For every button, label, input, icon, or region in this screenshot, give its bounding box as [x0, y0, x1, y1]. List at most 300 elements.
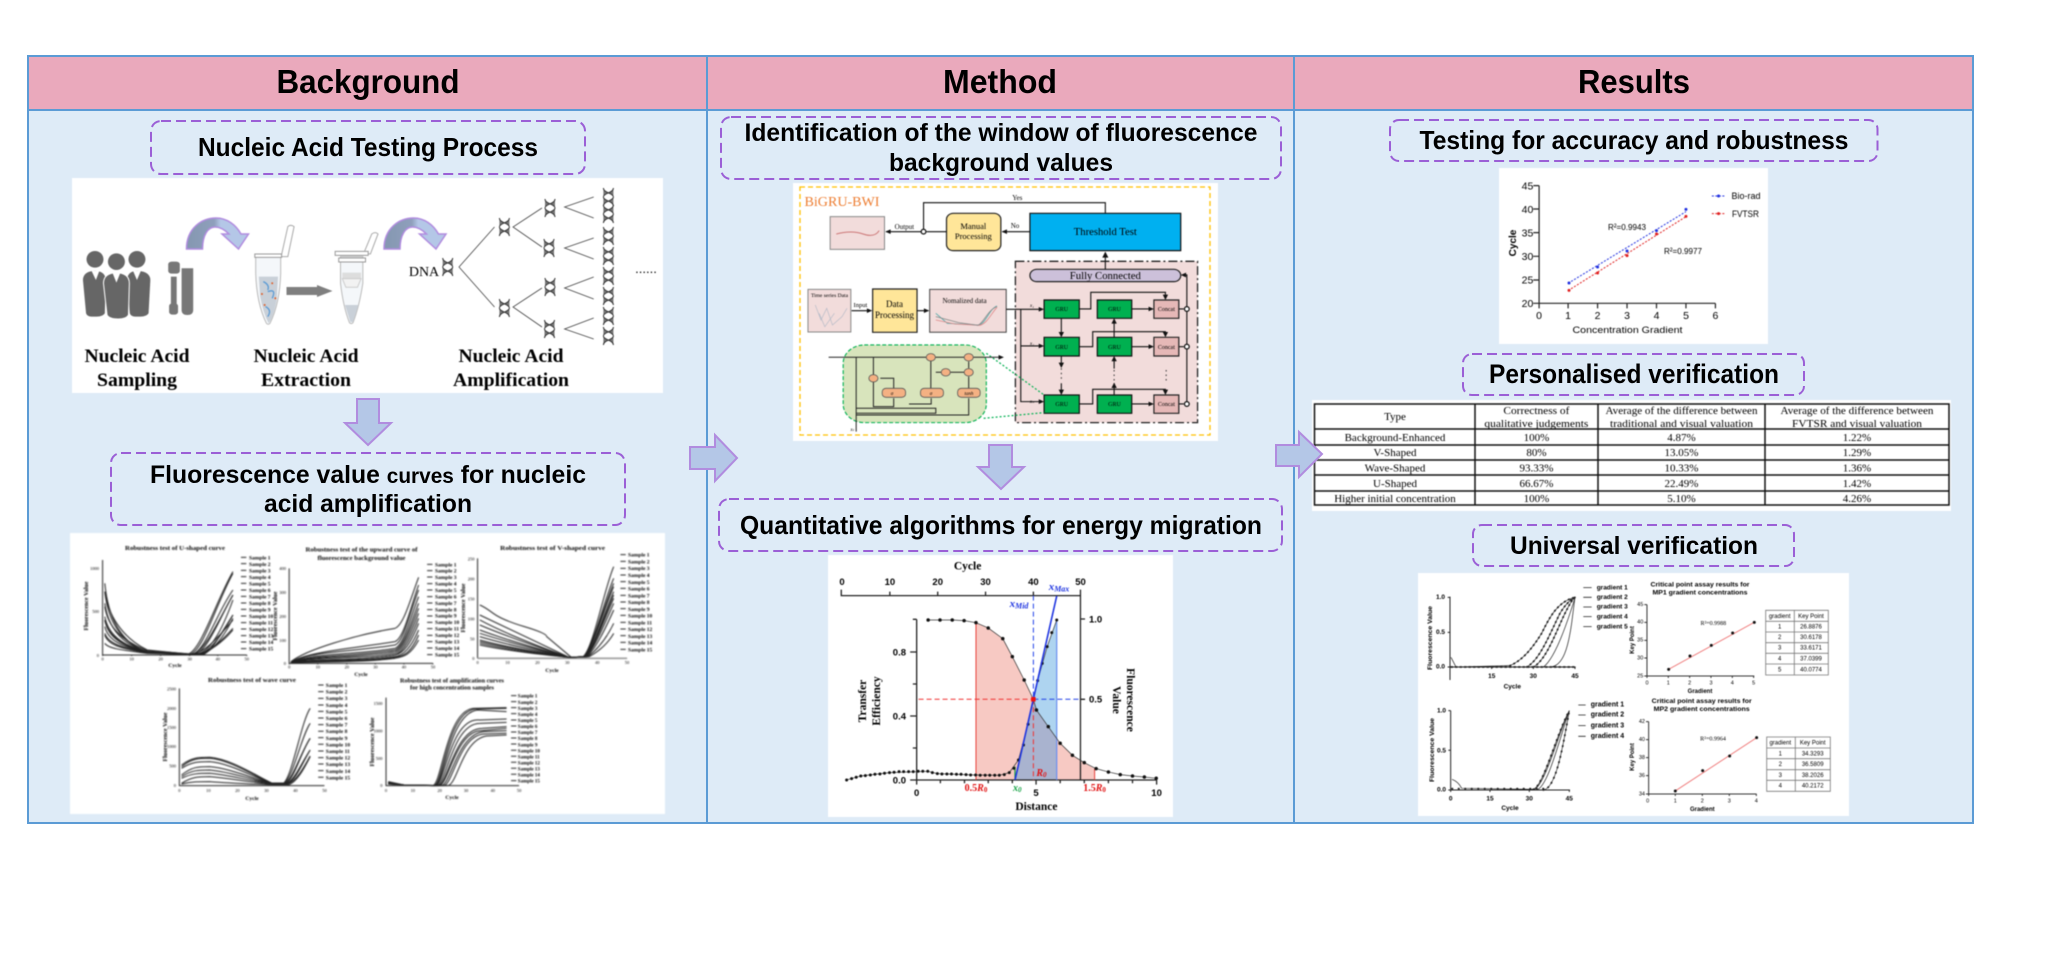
chart: MP2 amplification curves: 45 [1566, 795, 1573, 802]
chart: upward curve: fluorescence background value [318, 555, 406, 562]
chart: high concentration curve: Sample 1 [518, 695, 538, 700]
chart: U-shaped curve: Sample 2 [249, 562, 271, 568]
chart: high concentration curve: 40 [491, 788, 496, 793]
chart: U-shaped curve: Sample 5 [249, 581, 271, 587]
chart: MP1 amplification curves: gradient 3 [1597, 604, 1628, 611]
table: personalised verification: 93.33% [1519, 462, 1553, 474]
table: MP1 key points: 2 [1778, 635, 1782, 641]
chart: high concentration curve: Sample 2 [518, 701, 538, 706]
chart: MP2 amplification curves: gradient 1 [1591, 702, 1624, 709]
table: MP2 key points: 36.5809 [1802, 762, 1824, 768]
icon: people [83, 251, 150, 319]
chart: U-shaped curve: Sample 12 [249, 627, 274, 633]
chart: U-shaped curve: Sample 8 [249, 601, 271, 607]
image: nucleic acid testing process [72, 178, 663, 393]
GRU cells [1044, 300, 1132, 413]
chart: MP1 amplification curves: 30 [1530, 673, 1537, 680]
chart labels: Max [1053, 584, 1069, 594]
chart: V-shaped curve: Sample 3 [628, 566, 650, 572]
chart: wave curve: 500 [169, 764, 177, 768]
table: MP2 key points [1767, 737, 1830, 791]
chart: high concentration curve: 0 [380, 783, 383, 788]
chart: MP1 amplification curves: 1.0 [1436, 594, 1445, 601]
chart: upward curve: Sample 9 [435, 614, 457, 620]
chart: cycle vs concentration gradient: Bio-rad [1732, 191, 1760, 201]
chart: upward curve: 20 [345, 664, 350, 670]
labels: process steps: Nucleic Acid [458, 346, 564, 367]
table: MP2 key points: 38.2026 [1802, 773, 1824, 779]
chart: U-shaped curve: Robustness test of U-shaped curve [125, 545, 225, 552]
time series box [808, 289, 851, 332]
chart: upward curve: 30 [373, 664, 378, 670]
chart: U-shaped curve: 20 [158, 656, 164, 662]
chart: high concentration curve: 500 [376, 756, 383, 761]
table: personalised verification: traditional and visual valuation [1610, 418, 1754, 430]
chart: high concentration curve: Sample 6 [518, 725, 538, 730]
chart: MP2 critical point regression: 1 [1674, 799, 1677, 805]
chart: MP1 critical point regression: 30 [1637, 655, 1643, 661]
tangent [1015, 596, 1057, 780]
chart: cycle vs concentration gradient: 45 [1522, 180, 1533, 192]
chart: MP1 critical point regression [1630, 581, 1755, 695]
chart: MP2 amplification curves: Cycle [1501, 805, 1519, 812]
chart labels: 0.8 [893, 648, 906, 658]
chart: energy migration transfer efficiency [828, 555, 1173, 817]
labels: process steps: Nucleic Acid [84, 346, 190, 367]
chart: MP1 critical point regression: R²=0.9988 [1700, 621, 1726, 627]
chart: V-shaped curve: Sample 10 [628, 614, 653, 620]
chart: V-shaped curve: Sample 2 [628, 559, 650, 565]
chart: MP2 amplification curves: 0.5 [1437, 747, 1446, 754]
chart: MP2 amplification curves: gradient 4 [1591, 733, 1624, 740]
chart: high concentration curve: Cycle [445, 795, 459, 801]
table: personalised verification: U-Shaped [1373, 478, 1417, 490]
subheading: Nucleic Acid Testing Process [151, 121, 585, 174]
table: MP1 key points: Key Point [1798, 614, 1824, 620]
chart: V-shaped curve: Sample 14 [628, 641, 653, 647]
chart: upward curve: Sample 13 [435, 639, 460, 645]
diagram: DNA amplification tree [409, 188, 657, 345]
chart: upward curve: Cycle [354, 672, 368, 678]
table: MP1 key points: 33.6171 [1800, 646, 1822, 652]
table: MP2 key points: Key Point [1800, 740, 1826, 746]
chart: U-shaped curve: 0 [97, 653, 100, 658]
chart: high concentration curve: 30 [464, 788, 469, 793]
chart: wave curve: 2500 [167, 686, 177, 692]
chart: upward curve: Sample 10 [435, 620, 460, 626]
chart: high concentration curve: 0 [385, 788, 388, 793]
icon: extraction tube two [335, 233, 378, 324]
chart: MP1 amplification curves: gradient 4 [1597, 613, 1628, 620]
diagram labels: Concat [1158, 345, 1175, 351]
chart: upward curve: 400 [279, 566, 287, 571]
chart: wave curve: 30 [264, 788, 269, 793]
subheading: Personalised verification [1463, 354, 1804, 395]
chart: MP1 amplification curves [1427, 584, 1628, 690]
chart: wave curve: Sample 10 [326, 742, 350, 748]
chart: upward curve: Sample 15 [435, 652, 460, 658]
chart labels: 50 [1075, 577, 1086, 588]
table: personalised verification: 80% [1526, 447, 1546, 459]
GRU detail panel [829, 345, 1044, 432]
diagram labels: GRU [1108, 345, 1121, 351]
icon: extraction tube one [255, 225, 294, 324]
chart: MP2 critical point regression: 36 [1639, 773, 1645, 779]
chart: wave curve: Sample 12 [326, 756, 350, 762]
chart: MP2 critical point regression: 42 [1639, 719, 1645, 725]
chart: wave curve: Sample 7 [326, 723, 348, 729]
chart: cycle vs concentration gradient [1499, 168, 1768, 344]
shaded regions [976, 620, 1095, 780]
chart: cycle vs concentration gradient: FVTSR [1732, 209, 1759, 219]
chart: cycle vs concentration gradient: 2 [1595, 310, 1601, 322]
chart: MP2 critical point regression [1630, 698, 1758, 813]
table: MP2 key points: 4 [1779, 784, 1783, 790]
table: personalised verification: 1.36% [1843, 462, 1871, 474]
table: personalised verification: V-Shaped [1374, 447, 1417, 459]
manual processing box [947, 213, 1001, 251]
diagram labels: GRU [1108, 402, 1121, 408]
chart labels [839, 560, 1162, 813]
chart: MP1 critical point regression: Gradient [1688, 689, 1712, 695]
chart: V-shaped curve: 30 [565, 660, 570, 665]
diagram labels: GRU [1108, 307, 1121, 313]
chart: upward curve: 100 [279, 638, 287, 643]
subheading: Personalised verification: Personalised verification [1489, 359, 1779, 389]
chart labels: 0.0 [893, 776, 906, 786]
table: personalised verification: 5.10% [1667, 493, 1696, 505]
chart: high concentration curve: Robustness test of amplification curves [400, 677, 504, 684]
table: MP1 key points [1766, 610, 1828, 675]
chart: U-shaped curve: Sample 13 [249, 634, 274, 640]
diagram: BiGRU-BWI architecture: BiGRU-BWI [804, 195, 880, 210]
icon: straight arrow [286, 285, 332, 297]
fully connected layer [1030, 269, 1181, 282]
chart: V-shaped curve: Sample 8 [628, 600, 650, 606]
chart labels: 0 [1018, 786, 1022, 794]
chart: cycle vs concentration gradient: 20 [1522, 298, 1533, 310]
subheading: Fluorescence value curves: Fluorescence value curves for nucleic [150, 461, 586, 489]
chart: high concentration curve: Sample 15 [518, 780, 540, 785]
chart labels: 0.5R [965, 783, 984, 794]
chart: high concentration curve: Sample 9 [518, 743, 538, 748]
chart: V-shaped curve: Sample 13 [628, 634, 653, 640]
chart: wave curve: Cycle [245, 796, 259, 802]
table: MP1 key points: 5 [1778, 667, 1782, 673]
heading bar: Results [1294, 56, 1973, 110]
table: personalised verification: 13.05% [1665, 447, 1698, 459]
chart: V-shaped curve: Sample 11 [628, 620, 652, 626]
chart: wave curve: Sample 13 [326, 762, 350, 768]
output chart box [830, 217, 885, 249]
icon: curved arrow one [186, 218, 248, 249]
chart: wave curve: 1000 [167, 744, 177, 749]
table: MP2 key points: 40.2172 [1802, 784, 1824, 790]
chart: MP1 critical point regression: MP1 gradient concentrations [1652, 589, 1748, 596]
chart: wave curve: Sample 11 [326, 749, 350, 755]
table: MP1 key points: 37.0399 [1800, 656, 1822, 662]
chart: MP1 amplification curves: Fluorescence Value [1427, 606, 1434, 670]
chart: MP2 amplification curves: 30 [1526, 795, 1533, 802]
chart: cycle vs concentration gradient: Concentration Gradient [1572, 325, 1683, 336]
chart: upward curve: 10 [316, 664, 321, 670]
chart: U-shaped curve: 40 [216, 656, 221, 662]
chart labels: 20 [932, 577, 943, 588]
chart: U-shaped curve [84, 545, 274, 669]
table: personalised verification: 100% [1524, 432, 1549, 444]
chart: upward curve: Sample 5 [435, 588, 457, 594]
chart: U-shaped curve: Sample 3 [249, 568, 271, 574]
chart: MP1 amplification curves: gradient 1 [1597, 584, 1628, 591]
subheading: Fluorescence value curves: acid amplification [264, 490, 472, 518]
chart: MP2 critical point regression: 34 [1639, 791, 1645, 797]
chart labels: Fluorescence [1124, 668, 1136, 732]
chart: U-shaped curve: Sample 15 [249, 647, 274, 653]
chart labels: 0 [839, 577, 845, 588]
chart labels: R [1036, 768, 1043, 779]
chart: V-shaped curve: Cycle [545, 668, 559, 674]
chart: cycle vs concentration gradient: Cycle [1508, 229, 1519, 256]
subheading: Nucleic Acid Testing Process: Nucleic Acid Testing Process [198, 132, 538, 162]
table: personalised verification: Correctness of [1503, 405, 1570, 417]
diagram labels: x₁ [1029, 304, 1034, 309]
diagram: DNA amplification tree: ...... [635, 261, 657, 276]
chart: MP1 critical point regression: 25 [1637, 673, 1643, 679]
image: universal verification charts [1418, 573, 1849, 816]
table: MP1 key points: gradient [1769, 614, 1791, 620]
table: personalised verification: Higher initial concentration [1334, 493, 1456, 505]
diagram labels: xₙ [1029, 400, 1035, 405]
chart labels: 0 [914, 788, 919, 799]
chart: MP1 amplification curves: Cycle [1504, 683, 1521, 690]
arrow: down to fluorescence curves [345, 399, 391, 445]
chart: U-shaped curve: 500 [92, 609, 100, 614]
chart: MP1 critical point regression: 35 [1637, 638, 1643, 644]
chart: MP1 critical point regression: 1 [1667, 681, 1670, 687]
data processing box [873, 289, 917, 332]
chart: upward curve: Fluorescence Value [273, 591, 279, 641]
diagram labels: Processing [875, 310, 914, 320]
heading bar: Method: Method [943, 63, 1057, 100]
diagram labels: Concat [1158, 307, 1175, 313]
table: personalised verification [1312, 400, 1951, 511]
labels: process steps [84, 346, 569, 391]
subheading: identification of window: background values [889, 149, 1113, 177]
chart: wave curve: Sample 5 [326, 709, 348, 715]
arrow: background to method [690, 435, 737, 481]
chart: V-shaped curve: Sample 12 [628, 627, 653, 633]
chart: V-shaped curve: Sample 5 [628, 580, 650, 586]
chart: high concentration curve: Fluorescence Value [370, 717, 376, 767]
chart labels: 0 [984, 786, 988, 794]
diagram labels: σ [930, 392, 933, 397]
chart: wave curve: 1500 [167, 725, 177, 730]
chart labels: 0.4 [893, 712, 907, 722]
chart labels: Distance [1015, 801, 1057, 813]
chart: upward curve: Sample 2 [435, 569, 457, 575]
table: personalised verification: 100% [1524, 493, 1549, 505]
chart: U-shaped curve: 0 [101, 656, 104, 662]
diagram: DNA amplification tree: DNA [409, 265, 440, 280]
table: MP1 key points: 30.6178 [1800, 635, 1822, 641]
diagram labels: No [1011, 222, 1020, 230]
heading bar: Background [28, 56, 707, 110]
chart: high concentration curve: Sample 12 [518, 761, 540, 766]
chart labels: Efficiency [871, 676, 883, 726]
chart: wave curve: 10 [206, 788, 211, 793]
chart: U-shaped curve: Sample 9 [249, 608, 271, 614]
chart: MP2 amplification curves: 15 [1486, 795, 1494, 802]
chart: MP2 amplification curves: 0.0 [1437, 787, 1446, 794]
chart: wave curve: 40 [293, 788, 298, 793]
chart: wave curve: Sample 8 [326, 729, 348, 735]
table: personalised verification: qualitative judgements [1484, 418, 1588, 430]
chart labels: 40 [1028, 577, 1039, 588]
chart: MP1 critical point regression: 3 [1709, 681, 1713, 687]
heading bar: Results: Results [1578, 63, 1690, 100]
chart: MP1 amplification curves: 15 [1488, 673, 1496, 680]
chart: wave curve [163, 677, 350, 802]
guides [919, 596, 1095, 780]
chart: U-shaped curve: Sample 11 [249, 621, 273, 627]
table: personalised verification: 66.67% [1519, 478, 1553, 490]
chart: high concentration curve: 20 [437, 788, 443, 793]
table: MP2 key points: 34.3293 [1802, 752, 1824, 758]
labels: process steps: Nucleic Acid [254, 346, 359, 367]
diagram labels: Processing [955, 231, 992, 241]
chart: V-shaped curve: Sample 1 [628, 553, 650, 559]
image: fluorescence curve charts [70, 533, 665, 814]
chart: cycle vs concentration gradient: 3 [1624, 310, 1630, 322]
chart labels: Value [1110, 686, 1122, 714]
chart: upward curve: Sample 4 [435, 582, 457, 588]
chart: U-shaped curve: Sample 14 [249, 640, 274, 646]
labels: process steps: Amplification [453, 370, 569, 391]
chart: V-shaped curve: 20 [535, 660, 540, 665]
diagram labels: Time series Data [811, 293, 849, 299]
chart: V-shaped curve: 10 [505, 660, 510, 665]
chart: cycle vs concentration gradient: R²=0.9943 [1608, 222, 1646, 232]
subheading: Universal verification [1473, 525, 1794, 566]
heading bar: Method [707, 56, 1294, 110]
chart: wave curve: Robustness test of wave curve [208, 677, 296, 684]
chart: MP1 amplification curves: gradient 5 [1597, 623, 1628, 630]
chart: MP1 amplification curves: 0.5 [1436, 629, 1445, 636]
chart: V-shaped curve: Sample 15 [628, 647, 653, 653]
chart: wave curve: Sample 14 [326, 769, 350, 775]
table: MP1 key points: 26.8876 [1800, 624, 1822, 630]
chart: high concentration curve: 1000 [374, 728, 383, 734]
diagram labels: Manual [960, 221, 987, 231]
chart labels: x [1010, 598, 1015, 610]
chart labels: 1.5R [1083, 783, 1102, 794]
table: personalised verification: 10.33% [1665, 462, 1698, 474]
chart: upward curve: Sample 3 [435, 575, 457, 581]
table: MP1 key points: 1 [1778, 624, 1782, 630]
chart: V-shaped curve [461, 545, 653, 674]
chart: MP2 critical point regression: 38 [1639, 755, 1645, 761]
chart: high concentration curve: Sample 11 [518, 755, 540, 760]
chart: V-shaped curve: Sample 7 [628, 593, 650, 599]
subheading: Testing for accuracy and robustness: Testing for accuracy and robustness [1420, 125, 1848, 155]
chart: U-shaped curve: Sample 4 [249, 575, 271, 581]
chart: MP2 amplification curves: Fluorescence Value [1429, 718, 1436, 782]
chart: MP1 critical point regression: Key Point [1630, 626, 1636, 654]
chart: MP2 critical point regression: 3 [1728, 799, 1731, 805]
chart: high concentration curve: Sample 3 [518, 707, 538, 712]
chart: high concentration curve: 1500 [374, 701, 383, 706]
chart: MP2 amplification curves: gradient 2 [1591, 712, 1624, 719]
table: MP1 key points: 3 [1778, 646, 1782, 652]
chart: U-shaped curve: 50 [245, 656, 250, 662]
subheading: Universal verification: Universal verification [1510, 532, 1758, 560]
chart: V-shaped curve: Sample 6 [628, 587, 650, 593]
chart: upward curve: 0 [288, 664, 291, 670]
table: personalised verification: 4.26% [1843, 493, 1871, 505]
chart: V-shaped curve: 50 [625, 660, 630, 665]
diagram labels: Nomalized data [942, 297, 987, 305]
diagram labels: Threshold Test [1074, 226, 1137, 238]
chart: cycle vs concentration gradient: 35 [1522, 228, 1533, 240]
chart: upward curve: 50 [431, 664, 436, 670]
table: personalised verification: 1.42% [1843, 478, 1871, 490]
chart: wave curve: Sample 9 [326, 736, 348, 742]
heading bar: Background: Background [276, 63, 460, 100]
chart: wave curve: 0 [174, 783, 177, 788]
chart labels: Cycle [954, 560, 981, 572]
chart: wave curve: Sample 2 [326, 690, 348, 696]
chart labels: 10 [1151, 788, 1162, 799]
diagram labels: Fully Connected [1070, 271, 1142, 282]
threshold test box [1030, 213, 1181, 251]
chart: high concentration curve: for high concentration samples [410, 684, 494, 691]
fully connected network box [1015, 261, 1198, 423]
chart: high concentration curve [370, 677, 540, 801]
table: personalised verification: Wave-Shaped [1365, 462, 1426, 474]
chart: V-shaped curve: 150 [468, 596, 475, 602]
chart: MP2 amplification curves: 1.0 [1437, 708, 1446, 715]
chart: MP1 critical point regression: 5 [1752, 681, 1755, 687]
chart: U-shaped curve: Sample 10 [249, 614, 274, 620]
table: personalised verification: Average of the difference between [1606, 405, 1758, 417]
table: MP2 key points: 1 [1779, 752, 1783, 758]
chart: MP2 amplification curves: gradient 3 [1591, 722, 1624, 729]
diagram labels: Concat [1158, 402, 1175, 408]
table: MP2 key points: gradient [1769, 740, 1791, 746]
chart: wave curve: 2000 [167, 706, 177, 711]
chart: upward curve: Sample 7 [435, 601, 457, 607]
chart: MP1 critical point regression: 4 [1731, 681, 1734, 687]
chart: U-shaped curve: 30 [187, 656, 193, 662]
panel: background [28, 56, 707, 823]
chart: wave curve: 50 [322, 788, 328, 793]
chart: U-shaped curve: Fluorescence Value [84, 581, 90, 631]
chart: cycle vs concentration gradient: 25 [1522, 274, 1533, 286]
table: personalised verification: 4.87% [1667, 432, 1696, 444]
chart: V-shaped curve: 50 [470, 636, 475, 642]
chart: MP2 critical point regression: 40 [1639, 737, 1645, 743]
chart: upward curve: Sample 1 [435, 562, 457, 568]
chart: high concentration curve: 10 [411, 788, 416, 793]
table: MP1 key points: 4 [1778, 656, 1782, 662]
diagram: BiGRU-BWI architecture [793, 183, 1218, 441]
chart: cycle vs concentration gradient: 1 [1565, 310, 1571, 322]
chart labels: 0.5 [1089, 695, 1103, 706]
chart: high concentration curve: Sample 8 [518, 737, 538, 742]
diagram labels: σ [891, 392, 894, 397]
chart: upward curve [273, 547, 460, 678]
chart: wave curve: Sample 6 [326, 716, 348, 722]
